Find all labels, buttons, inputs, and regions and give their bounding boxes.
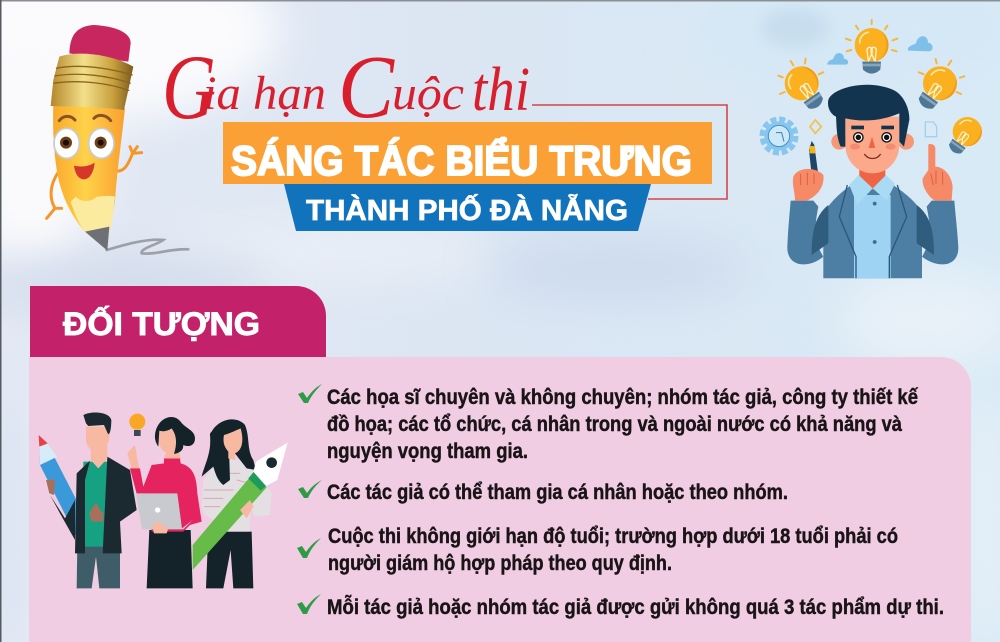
laptop dot [155,507,160,513]
right woman pants [206,532,253,588]
right woman sweater stripes [203,473,253,507]
neck [859,167,885,190]
jacket body [823,183,922,278]
pen nib [253,443,288,486]
item 1: nguyện vọng tham gia. [327,440,528,463]
icon: pencil mascot [47,25,188,254]
right woman hair [202,419,256,485]
hand on pen [240,500,253,518]
list of conditions [297,384,944,619]
collar [849,175,895,205]
man head and neck [86,427,111,468]
green pen [193,474,267,570]
woman skirt [147,530,193,588]
shirt buttons [873,202,877,244]
hair [828,85,909,147]
orange banner: SÁNG TÁC BIỂU TRƯNG [231,136,692,184]
green pen band [248,472,267,491]
man jacket [75,457,137,553]
upper right bulb [910,60,964,117]
man legs [77,545,120,588]
decorative title frame line [532,105,727,199]
raised hand [127,445,139,468]
man shirt [83,462,108,547]
woman sweater [130,458,202,532]
item 1: Các họa sĩ chuyên và không chuyên; nhóm tác giả, công ty thiết kế [327,386,918,409]
shirt [854,195,891,278]
script title: uộc [392,67,464,120]
right hand finger lines [931,171,943,185]
ears [831,134,914,150]
script title: thi [472,56,530,124]
eyes [54,128,114,158]
body [53,105,125,233]
pen nib hole [266,457,277,468]
clouds [827,36,933,65]
blue banner: THÀNH PHỐ ĐÀ NẴNG [306,192,628,227]
right hand [923,144,953,201]
right bulb [941,111,988,160]
item 3 [297,525,898,575]
dark sleeves shade [812,205,934,255]
eyebrows [59,115,111,121]
eyebrows and eyes [851,126,894,142]
left hand [793,169,824,201]
right arm [922,201,958,264]
blue pencil [39,435,77,537]
woman head [158,428,181,458]
pen [809,141,818,175]
man hair [83,412,111,434]
left hand finger lines [801,173,814,185]
script title: G [162,36,216,138]
laptop [136,493,193,529]
item 2: Các tác giả có thể tham gia cá nhân hoặc theo nhóm. [327,481,788,504]
mouth [74,163,95,179]
gear [762,119,796,153]
panel: target participants [29,357,971,642]
left arm [47,172,62,218]
right woman face [223,428,242,460]
blue banner [284,184,651,231]
document glyph [925,122,937,137]
sparkle diamond [810,120,821,133]
ferrule [51,54,133,110]
right woman sweater [202,458,272,532]
woman hand [152,522,168,533]
cheeks, nose, mouth [850,137,896,158]
script title: ia hạn [203,67,326,120]
script title: C [338,38,395,137]
bulb [129,414,145,436]
left bulb [778,60,832,117]
right woman bun [210,431,217,438]
top bulb [855,28,889,74]
lapels [839,185,907,278]
item 3: Cuộc thi không giới hạn độ tuổi; trường hợp dưới 18 tuổi phải có [328,525,898,548]
pencil line squiggle [107,240,188,254]
bulb rays [778,20,964,94]
item 3: người giám hộ hợp pháp theo quy định. [328,552,672,575]
illustration: man with light bulbs [762,20,988,278]
illustration: three creatives [39,412,288,588]
item 1 [298,384,918,463]
face [845,117,899,173]
tab header: ĐỐI TƯỢNG [63,306,260,342]
left arm [787,201,823,264]
man hand on pencil [46,479,55,495]
tab header [30,286,326,357]
right arm [111,147,142,171]
item 1: đồ họa; các tổ chức, cá nhân trong và ngoài nước có khả năng và [327,413,902,436]
man thumb hand [89,503,103,522]
woman hair [155,417,195,454]
eraser [69,25,131,62]
man arm sleeve [50,495,75,540]
